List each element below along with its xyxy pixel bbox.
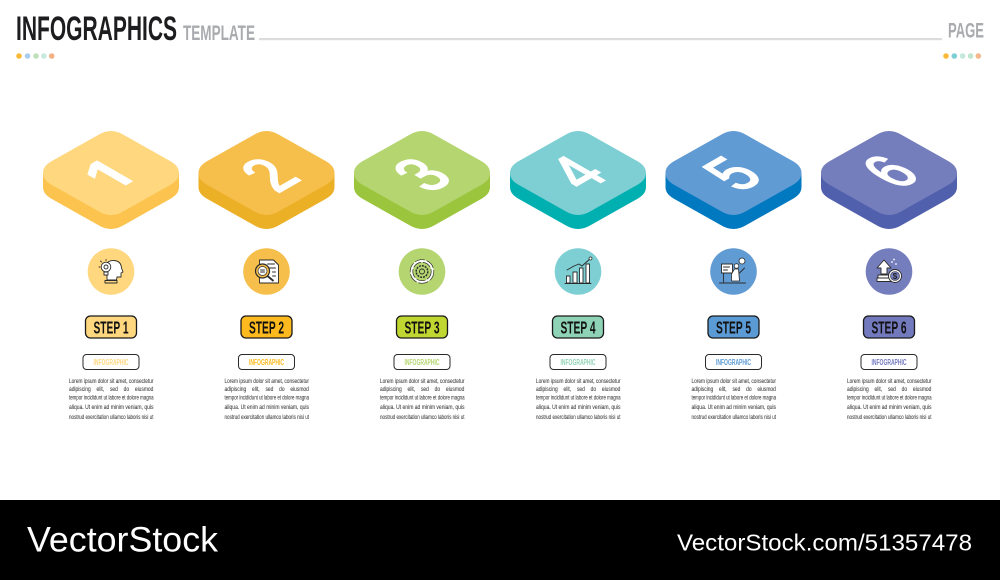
isometric tile 4: 4 xyxy=(531,146,623,199)
isometric tile 5 xyxy=(666,131,802,229)
text block 1: Lorem ipsum dolor sit amet, consectetur xyxy=(69,378,154,385)
text block 2 xyxy=(224,378,310,421)
text block 3: tempor incididunt ut labore et dolore magna xyxy=(380,394,465,402)
left colour dots xyxy=(16,53,54,59)
step 2 label: STEP 2 xyxy=(249,318,284,338)
text block 3: nostrud exercitation ullamco laboris nisi ut xyxy=(380,414,465,421)
icon circle: bar chart xyxy=(555,248,601,295)
step 6 label: STEP 6 xyxy=(872,318,907,338)
title: TEMPLATE xyxy=(183,22,255,45)
infographic tag 6: INFOGRAPHIC xyxy=(872,357,906,367)
isometric tile 3 xyxy=(354,131,490,229)
text block 6 xyxy=(847,378,932,421)
icon circle: rising coin stack: $ xyxy=(893,272,898,281)
text block 1 xyxy=(69,378,154,421)
isometric tile 3: 3 xyxy=(376,148,468,201)
panel: step 1 xyxy=(43,131,179,421)
footer logo: VectorStock xyxy=(27,520,219,560)
text block 2: aliqua. Ut enim ad minim veniam, quis xyxy=(224,404,309,411)
step 4 label xyxy=(552,316,604,338)
footer url: VectorStock.com/51357478 xyxy=(677,530,972,556)
icon circle: presenter at board xyxy=(710,248,757,295)
isometric tile 2 xyxy=(198,131,334,229)
infographic tag 4 xyxy=(550,354,606,370)
text block 4: nostrud exercitation ullamco laboris nisi ut xyxy=(536,414,621,421)
isometric tile 4 xyxy=(510,131,646,229)
right colour dots xyxy=(943,53,981,59)
text block 1: nostrud exercitation ullamco laboris nisi ut xyxy=(69,414,154,421)
panel: step 4 xyxy=(510,131,646,421)
icon circle: gear cycle xyxy=(399,248,445,295)
text block 3 xyxy=(380,378,465,421)
text block 4: tempor incididunt ut labore et dolore magna xyxy=(536,394,621,402)
title: INFOGRAPHICS xyxy=(16,10,177,48)
text block 6: Lorem ipsum dolor sit amet, consectetur xyxy=(847,378,932,385)
infographic tag 5: INFOGRAPHIC xyxy=(716,357,751,367)
step 3 label: STEP 3 xyxy=(404,318,440,338)
infographic tag 1: INFOGRAPHIC xyxy=(94,357,128,367)
infographic tag 4: INFOGRAPHIC xyxy=(560,357,596,367)
text block 5 xyxy=(692,378,777,421)
text block 1: aliqua. Ut enim ad minim veniam, quis xyxy=(69,404,154,411)
panel: step 3 xyxy=(354,131,490,421)
step 1 label xyxy=(86,316,136,338)
step 3 label xyxy=(396,316,448,338)
text block 2: tempor incididunt ut labore et dolore magna xyxy=(224,394,309,402)
isometric tile 6 xyxy=(821,131,957,229)
infographic tag 1 xyxy=(83,354,139,370)
text block 6: aliqua. Ut enim ad minim veniam, quis xyxy=(847,404,932,411)
text block 3: aliqua. Ut enim ad minim veniam, quis xyxy=(380,404,465,411)
infographic tag 3 xyxy=(394,354,450,370)
step 2 label xyxy=(241,316,292,338)
isometric tile 1 xyxy=(43,131,179,229)
text block 5: aliqua. Ut enim ad minim veniam, quis xyxy=(692,404,776,411)
text block 6: nostrud exercitation ullamco laboris nisi ut xyxy=(847,414,932,421)
infographic tag 2: INFOGRAPHIC xyxy=(249,357,284,367)
step 5 label: STEP 5 xyxy=(716,318,751,338)
infographic tag 5 xyxy=(706,354,762,370)
footer bar xyxy=(0,500,1000,580)
text block 5: Lorem ipsum dolor sit amet, consectetur xyxy=(692,378,777,385)
text block 2: adipiscing elit, sed do eiusmod xyxy=(224,386,309,393)
text block 3: Lorem ipsum dolor sit amet, consectetur xyxy=(380,378,465,385)
infographic tag 2 xyxy=(238,354,294,370)
text block 6: tempor incididunt ut labore et dolore magna xyxy=(847,394,932,402)
step 4 label: STEP 4 xyxy=(560,318,596,338)
isometric tile 6: 6 xyxy=(845,145,935,198)
panel: step 5 xyxy=(666,131,802,421)
step 1 label: STEP 1 xyxy=(94,318,129,338)
text block 2: Lorem ipsum dolor sit amet, consectetur xyxy=(224,378,310,385)
isometric tile 1: 1 xyxy=(63,146,167,207)
infographic tag 6 xyxy=(861,354,917,370)
text block 1: tempor incididunt ut labore et dolore magna xyxy=(69,394,154,402)
text block 4: Lorem ipsum dolor sit amet, consectetur xyxy=(536,378,621,385)
text block 4: aliqua. Ut enim ad minim veniam, quis xyxy=(536,404,621,411)
text block 3: adipiscing elit, sed do eiusmod xyxy=(380,386,464,393)
text block 5: nostrud exercitation ullamco laboris nisi ut xyxy=(692,414,776,421)
text block 4 xyxy=(536,378,621,421)
icon circle: head with idea xyxy=(88,248,134,295)
icon circle: rising coin stack xyxy=(866,248,912,295)
text block 2: nostrud exercitation ullamco laboris nisi ut xyxy=(224,414,309,421)
text block 5: tempor incididunt ut labore et dolore magna xyxy=(692,394,776,402)
text block 6: adipiscing elit, sed do eiusmod xyxy=(847,386,931,393)
isometric tile 2: 2 xyxy=(224,148,315,201)
text block 1: adipiscing elit, sed do eiusmod xyxy=(69,386,153,393)
step 6 label xyxy=(864,316,914,338)
panel: step 6 xyxy=(821,131,957,421)
icon circle: document with magnifier xyxy=(243,248,290,295)
text block 4: adipiscing elit, sed do eiusmod xyxy=(536,386,620,393)
panel: step 2 xyxy=(198,131,334,421)
text block 5: adipiscing elit, sed do eiusmod xyxy=(692,386,776,393)
step 5 label xyxy=(708,316,759,338)
isometric tile 5: 5 xyxy=(687,147,778,200)
infographic tag 3: INFOGRAPHIC xyxy=(404,357,440,367)
